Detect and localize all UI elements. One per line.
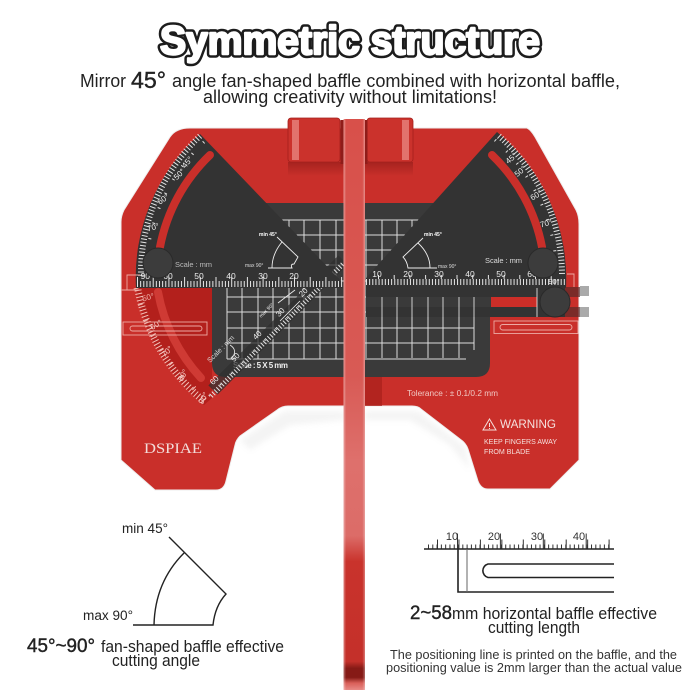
left mini angle mark: max 90° — [245, 263, 263, 269]
dark grid plate — [212, 203, 490, 377]
positioning note: The positioning line is printed on the baffle, and the — [390, 647, 677, 662]
angle diagram — [83, 521, 226, 625]
lower fan degree labels: 90° — [197, 391, 210, 406]
lower fan degree labels — [141, 292, 210, 406]
block shadows — [288, 162, 413, 176]
left knob — [143, 248, 173, 278]
left fan baffle: 30 — [258, 271, 268, 281]
lower left transparent fan — [136, 260, 343, 406]
baffle knob — [540, 287, 570, 317]
angle caption: cutting angle — [112, 652, 200, 670]
baffle outline — [424, 549, 614, 592]
ruler numbers: 20 — [488, 531, 500, 543]
left fan degree labels: 70° — [146, 222, 160, 233]
angle caption: 45°~90° — [27, 636, 95, 657]
left fan baffle: 50 — [194, 271, 204, 281]
lower fan degree labels: 80° — [176, 368, 190, 383]
right fan baffle — [366, 132, 566, 288]
lower fan degree labels: 60° — [149, 318, 164, 332]
lower left transparent fan: 20 — [297, 286, 310, 299]
body shadow — [240, 411, 470, 470]
red base plate — [121, 128, 579, 490]
title: Symmetric structure — [160, 19, 540, 63]
horizontal baffle — [366, 286, 589, 317]
angle diagram: max 90° — [83, 608, 133, 623]
warning label: FROM BLADE — [484, 447, 530, 456]
left fan baffle — [136, 134, 343, 288]
left stop block — [288, 118, 340, 162]
right stop block — [367, 118, 413, 162]
title: Symmetric structure — [160, 19, 540, 63]
left fan degree labels: 45° — [180, 155, 195, 170]
right fan degree labels — [504, 151, 553, 229]
right fan degree ticks — [499, 136, 562, 274]
length caption — [410, 603, 657, 637]
length caption: 2~58 — [410, 603, 452, 624]
left ruler — [137, 281, 343, 287]
right ruler — [366, 279, 566, 285]
right fan baffle: 30 — [434, 269, 444, 279]
right fan baffle: 50 — [496, 269, 506, 279]
center fence bar — [340, 119, 368, 690]
angle diagram: min 45° — [122, 521, 168, 536]
left fan baffle: 90° — [141, 271, 153, 281]
right fan degree labels: 50° — [513, 164, 528, 179]
right fan degree labels: 45° — [504, 151, 519, 166]
left mini angle mark: min 45° — [259, 232, 277, 238]
lower fan degree labels: 50° — [141, 292, 155, 303]
right fan degree labels: 60° — [529, 189, 544, 202]
left fan degree ticks — [141, 136, 200, 276]
right fan baffle: 60 — [527, 269, 537, 279]
subtitle — [80, 67, 620, 107]
left fan slot — [160, 155, 210, 247]
positioning note — [386, 647, 682, 675]
ruler numbers: 30 — [531, 531, 543, 543]
right fan baffle: 10 — [372, 269, 382, 279]
lower fan degree labels: 70° — [160, 344, 175, 359]
tool: cutting jig — [121, 118, 589, 690]
lower fan mini angle mark — [230, 290, 300, 358]
subtitle: allowing creativity without limitations! — [203, 86, 497, 107]
left scale label: Scale : mm — [175, 260, 212, 269]
square grid — [227, 220, 474, 359]
left mini angle mark — [245, 232, 298, 269]
right mini angle mark: max 90° — [438, 264, 456, 270]
right mini angle mark: min 45° — [424, 232, 442, 238]
lower fan mini angle mark: max 90° — [258, 302, 275, 319]
icon: warning triangle — [483, 419, 496, 430]
subtitle: 45° — [131, 67, 166, 93]
ruler ticks — [428, 544, 612, 548]
subtitle: Mirror — [80, 70, 126, 91]
length diagram — [424, 531, 614, 592]
left fan baffle: 20 — [289, 271, 299, 281]
left fan degree labels: 60° — [156, 192, 171, 207]
brand logo: DSPIAE — [144, 441, 202, 457]
lower left transparent fan: 60 — [208, 374, 221, 387]
warning label — [483, 417, 557, 456]
left fan degree labels: 50° — [172, 167, 187, 182]
right etched baffle outline — [494, 274, 578, 334]
angle caption: fan-shaped baffle effective — [101, 638, 284, 656]
lower left transparent fan: 30 — [274, 306, 287, 319]
ruler numbers — [446, 531, 585, 543]
warning label: KEEP FINGERS AWAY — [484, 437, 557, 446]
angle caption — [27, 636, 284, 670]
right knob — [528, 248, 558, 278]
left fan degree labels — [146, 155, 195, 233]
warning label: WARNING — [500, 417, 556, 431]
diagonal ruler — [213, 260, 343, 390]
left etched baffle outline — [121, 275, 207, 335]
left fan baffle: 40 — [226, 271, 236, 281]
right mini angle mark — [403, 232, 456, 270]
length caption: cutting length — [488, 619, 580, 637]
right fan baffle: 40 — [465, 269, 475, 279]
positioning note: positioning value is 2mm larger than the actual value — [386, 660, 682, 675]
right fan degree labels: 70° — [539, 218, 553, 229]
shadow beside blade — [365, 377, 382, 406]
right fan baffle: 20 — [403, 269, 413, 279]
left fan baffle: 60 — [163, 271, 173, 281]
lower fan scale label: Scale : mm — [206, 335, 236, 364]
right fan slot — [492, 155, 542, 247]
ruler numbers: 40 — [573, 531, 585, 543]
lower left transparent fan: 40 — [251, 329, 264, 342]
subtitle: angle fan-shaped baffle combined with horizontal baffle, — [172, 70, 620, 91]
tolerance label: Tolerance : ± 0.1/0.2 mm — [407, 389, 498, 398]
length caption: mm horizontal baffle effective — [452, 605, 657, 623]
grid scale label: Scale : 5 X 5 mm — [233, 361, 288, 370]
ruler numbers: 10 — [446, 531, 458, 543]
right scale label: Scale : mm — [485, 256, 522, 265]
right fan baffle: 90° — [548, 277, 560, 286]
lower left transparent fan: 50 — [229, 351, 242, 364]
